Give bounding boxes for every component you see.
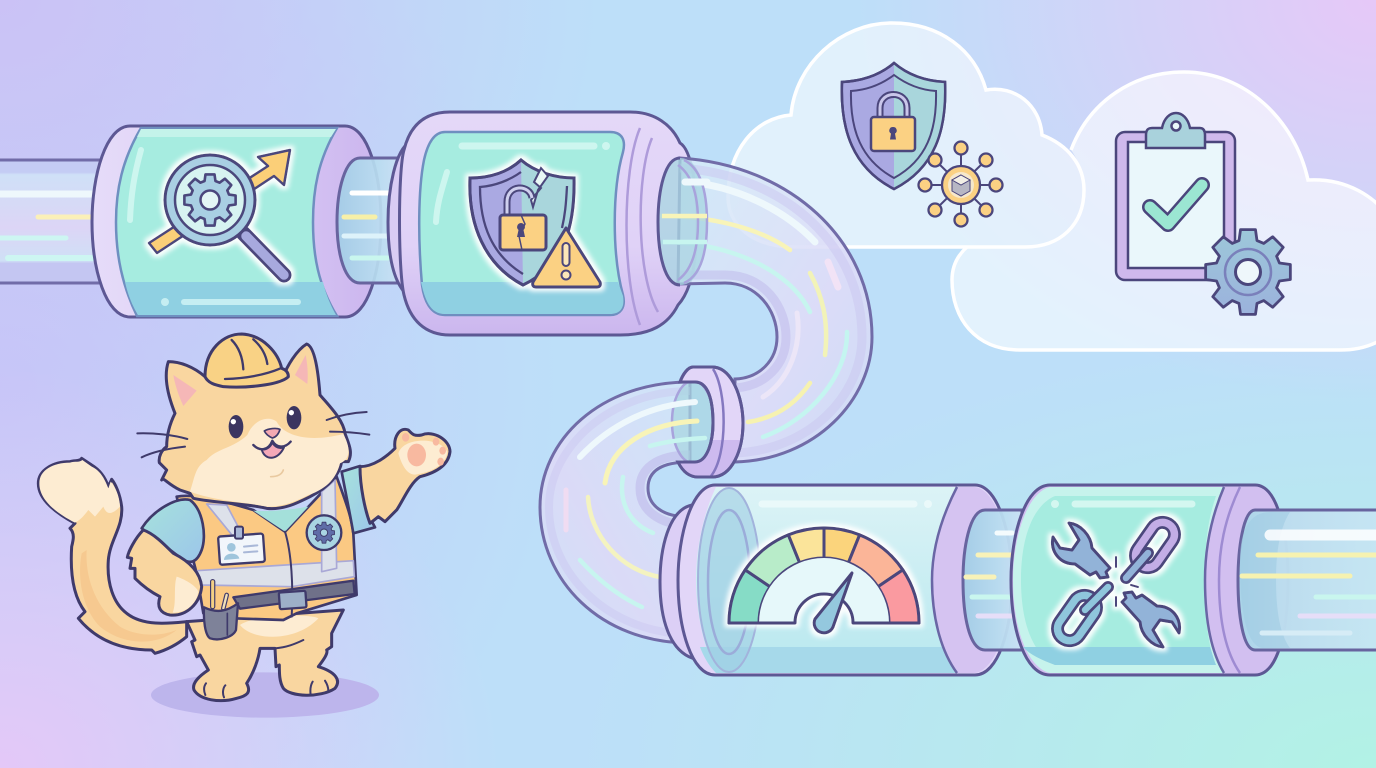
- tool pouch: [204, 582, 238, 639]
- pipe mouth of cylinder three: [963, 510, 1022, 650]
- cylinder one: analysis: [92, 126, 400, 317]
- tail: [38, 458, 187, 653]
- mouth streaks: [344, 193, 392, 258]
- cylinder housing: [1011, 485, 1288, 675]
- icon: cracked shield with warning: [470, 160, 600, 287]
- cream muzzle: [190, 419, 349, 507]
- cylinder three: performance gauge: [660, 485, 1012, 675]
- hard hat: [205, 334, 288, 387]
- pipe: S-bend lower body: [540, 382, 690, 643]
- glass body: [696, 487, 957, 673]
- rear collar: [660, 505, 692, 658]
- teal window: [419, 132, 624, 315]
- belt: [233, 581, 355, 609]
- icon: speedometer gauge: [729, 528, 919, 633]
- lower S-bend flow streaks: [566, 402, 705, 607]
- S-bend collar hole: [672, 381, 714, 463]
- cylinder housing: [400, 112, 697, 335]
- cylinder housing: [92, 126, 381, 317]
- teal window: [1013, 487, 1224, 673]
- teal window: [116, 128, 337, 316]
- shield: [842, 63, 945, 189]
- icon: magnifier gear arrow: [149, 150, 290, 275]
- cloud: compliance checklist background: [952, 72, 1376, 350]
- gear: [1206, 230, 1290, 314]
- legs and lower body: [187, 610, 343, 701]
- cloud: security network background: [728, 23, 1084, 247]
- cylinder housing: [678, 485, 1012, 675]
- vest: [177, 477, 357, 620]
- pipe: exit to right: [1238, 510, 1376, 650]
- connector streaks: [966, 533, 1012, 616]
- padlock: [871, 94, 915, 151]
- cylinder two: broken security: [388, 112, 697, 335]
- icon: broken wrench and chain: [1052, 518, 1180, 647]
- ear pink: [173, 375, 197, 406]
- icon: clipboard with checkmark and gear: [1116, 113, 1290, 314]
- rear flange: [388, 142, 414, 300]
- badge with gear: [307, 515, 341, 550]
- cat engineer mascot: [38, 334, 450, 718]
- pipe: S-bend upper body: [662, 158, 872, 462]
- pipe: S-bend collar: [678, 367, 743, 477]
- shirt sleeve left: [142, 499, 204, 562]
- raised arm with paw: [360, 429, 450, 523]
- glass end oval: [698, 488, 760, 672]
- pipe: entry from left: [0, 160, 110, 283]
- flow streaks: [0, 194, 94, 258]
- nose: [264, 428, 280, 438]
- ID badge: [218, 527, 265, 565]
- buckle: [279, 591, 307, 609]
- cylinder four: broken tools: [1011, 485, 1288, 675]
- shirt sleeve right: [342, 466, 375, 533]
- pipe mouth and connector: [337, 158, 400, 283]
- flow streaks: [662, 182, 847, 437]
- clipboard board: [1116, 113, 1235, 280]
- arm on hip: [127, 530, 202, 615]
- pipe mouth of cylinder two: [658, 158, 707, 285]
- ground shadow: [151, 672, 379, 718]
- flow streaks: [1242, 535, 1376, 633]
- mouth: [262, 443, 284, 458]
- network node: [918, 142, 1002, 226]
- icon: shield with padlock and network: [842, 63, 1002, 226]
- eyes: [229, 415, 243, 438]
- head: [137, 344, 369, 509]
- checkmark: [1150, 185, 1202, 224]
- whiskers: [137, 412, 369, 457]
